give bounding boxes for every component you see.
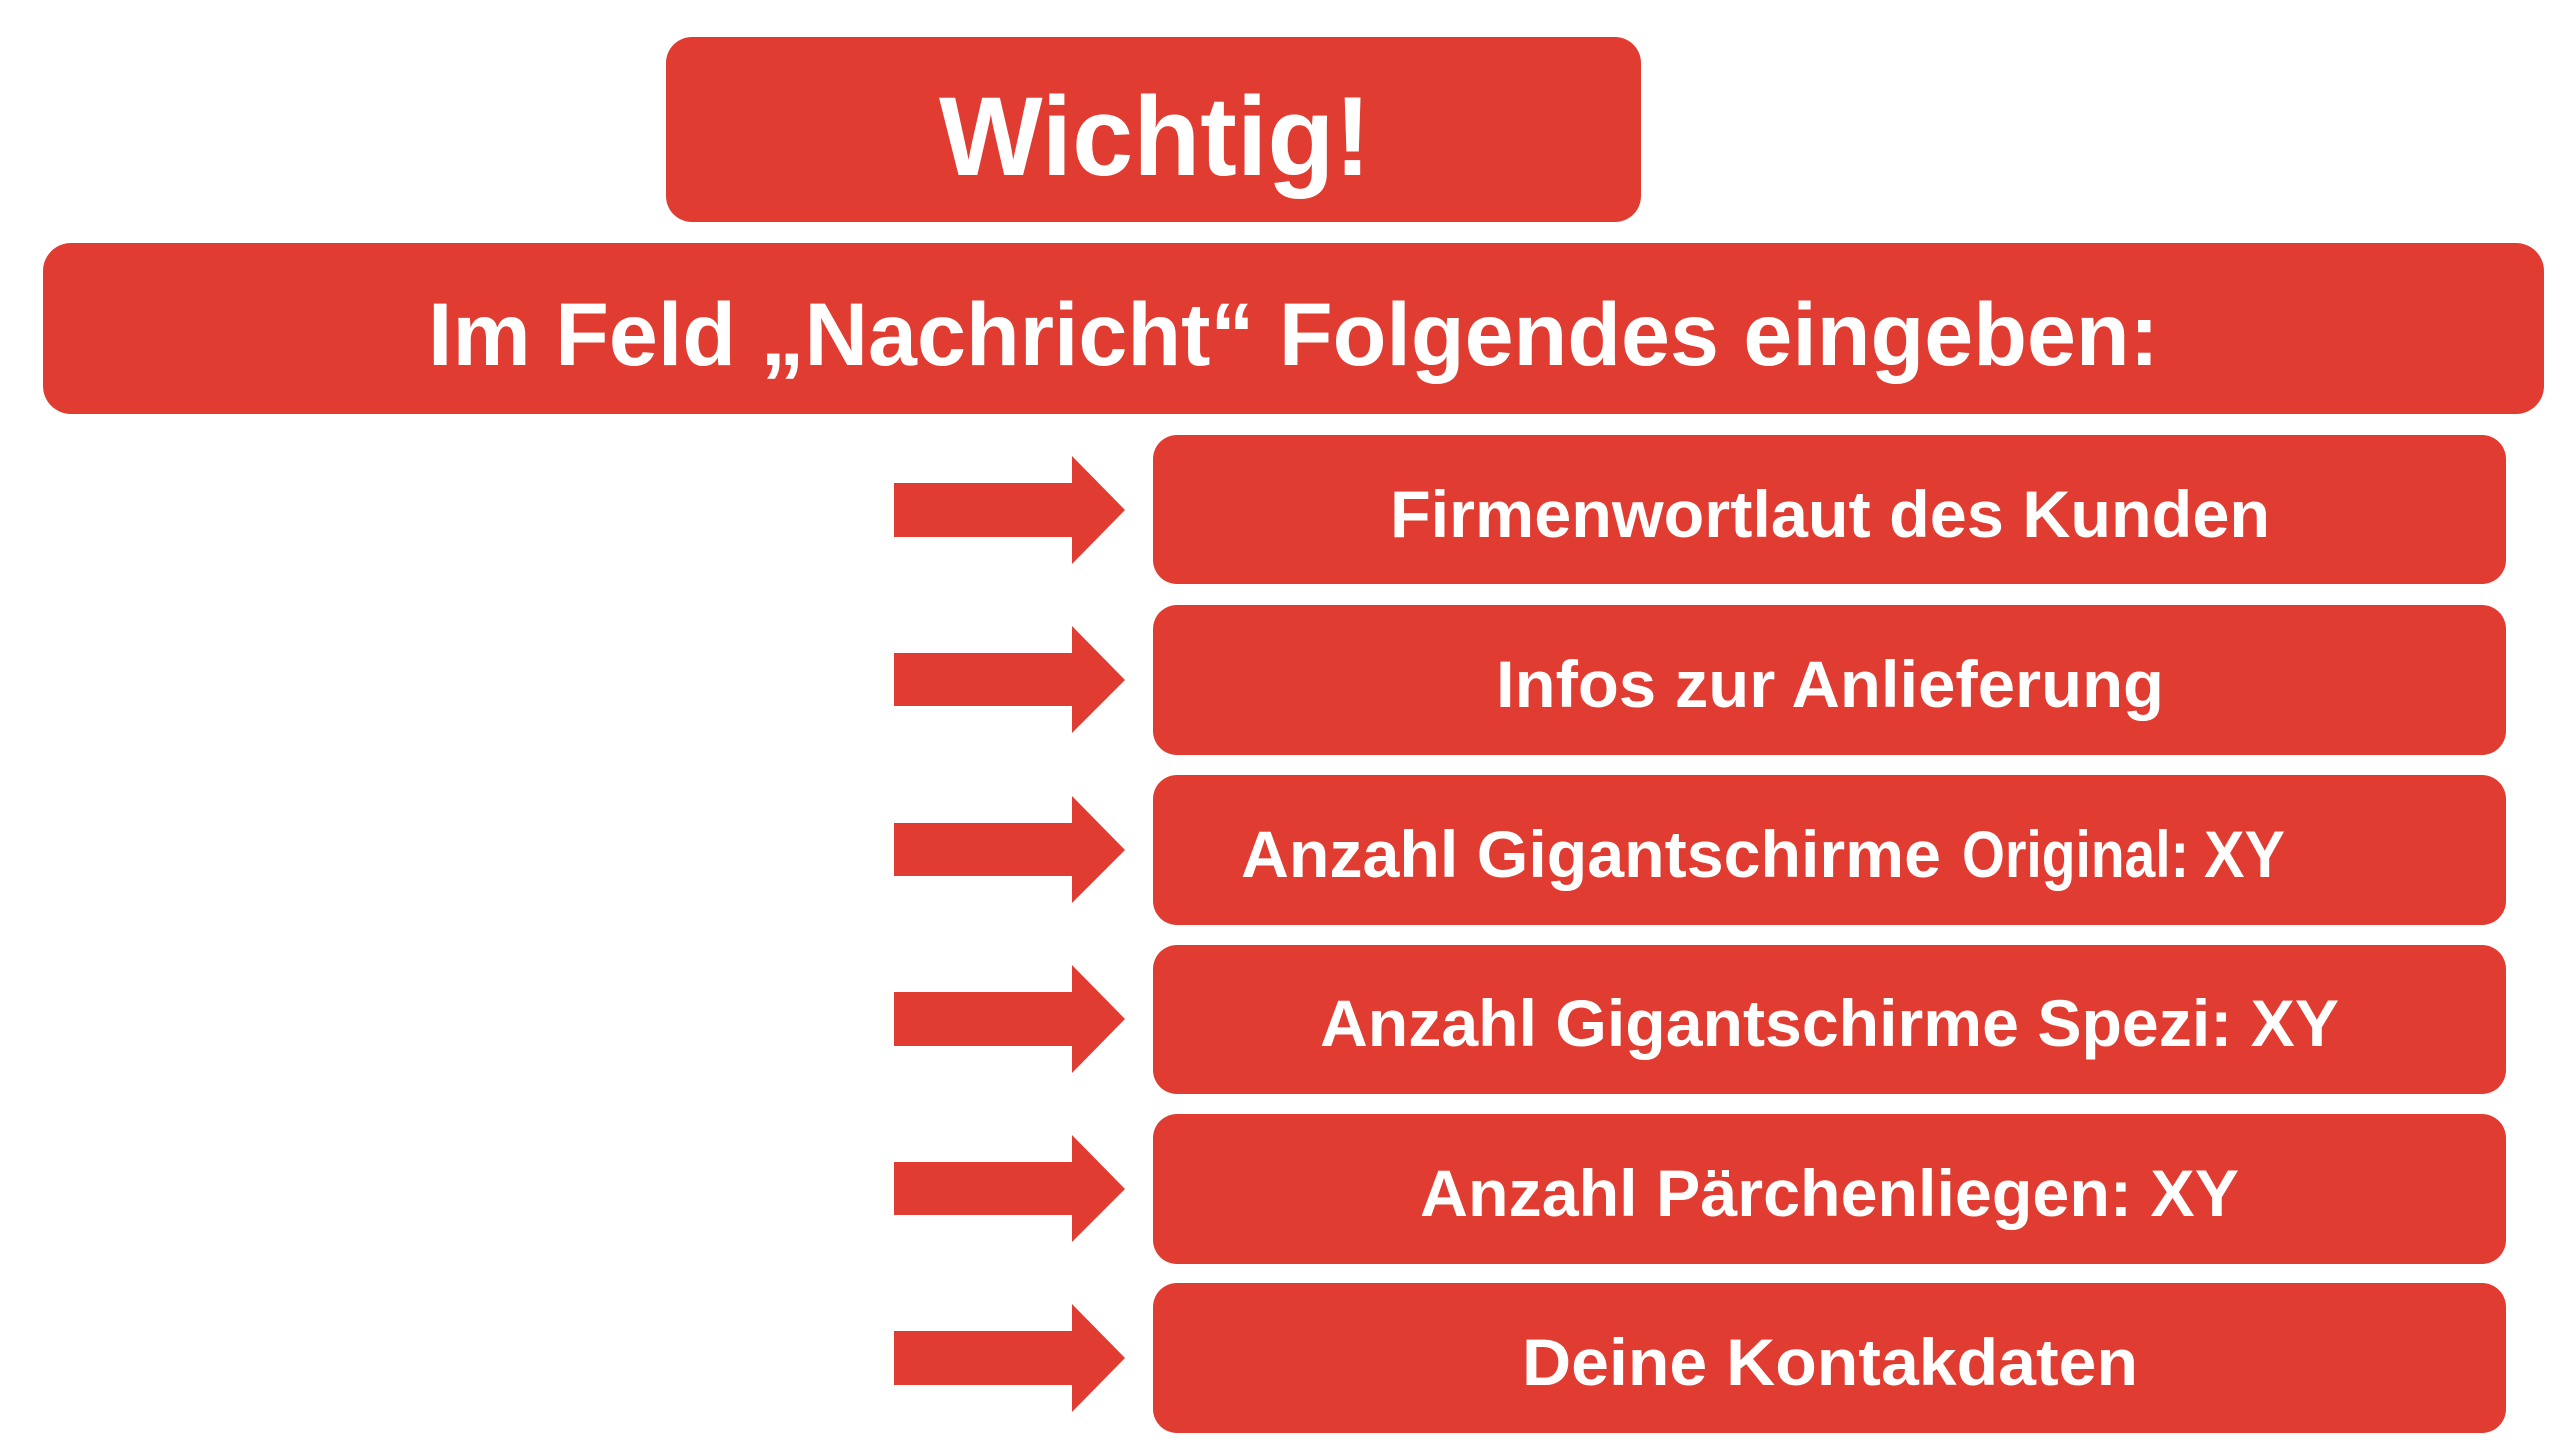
title: Wichtig!: Wichtig! (939, 74, 1371, 199)
arrow 4 (894, 965, 1125, 1073)
arrow 5 (894, 1135, 1125, 1242)
item 6: Deine Kontakdaten: Deine Kontakdaten (1522, 1325, 2138, 1399)
item 4: Anzahl Gigantschirme Spezi: Anzahl Gigantschirme Spezi: XY (1320, 986, 2339, 1060)
item 3: Anzahl Gigantschirme Original (1153, 775, 2506, 925)
item 3: Anzahl Gigantschirme Original: XY (2204, 817, 2285, 891)
item 3: Anzahl Gigantschirme Original: Original: (1962, 817, 2189, 891)
item 4: Anzahl Gigantschirme Spezi (1153, 945, 2506, 1094)
item 2: Infos zur Anlieferung: Infos zur Anlieferung (1496, 647, 2164, 721)
item 5: Anzahl Pärchenliegen: Anzahl Pärchenliegen: XY (1420, 1156, 2239, 1230)
item 5: Anzahl Pärchenliegen (1153, 1114, 2506, 1264)
heading: Im Feld Nachricht (43, 243, 2544, 414)
item 1: Firmenwortlaut des Kunden: Firmenwortlaut des Kunden (1390, 477, 2270, 551)
arrow 1 (894, 456, 1125, 564)
title: Wichtig! (666, 37, 1641, 222)
item 6: Deine Kontakdaten (1153, 1283, 2506, 1433)
item 3: Anzahl Gigantschirme Original: Anzahl Gigantschirme (1241, 817, 1941, 891)
arrow 3 (894, 796, 1125, 903)
arrow 2 (894, 626, 1125, 733)
arrow 6 (894, 1304, 1125, 1412)
item 1: Firmenwortlaut des Kunden (1153, 435, 2506, 584)
item 2: Infos zur Anlieferung (1153, 605, 2506, 755)
heading: Im Feld Nachricht: Im Feld „Nachricht“ Folgendes eingeben: (428, 284, 2159, 384)
